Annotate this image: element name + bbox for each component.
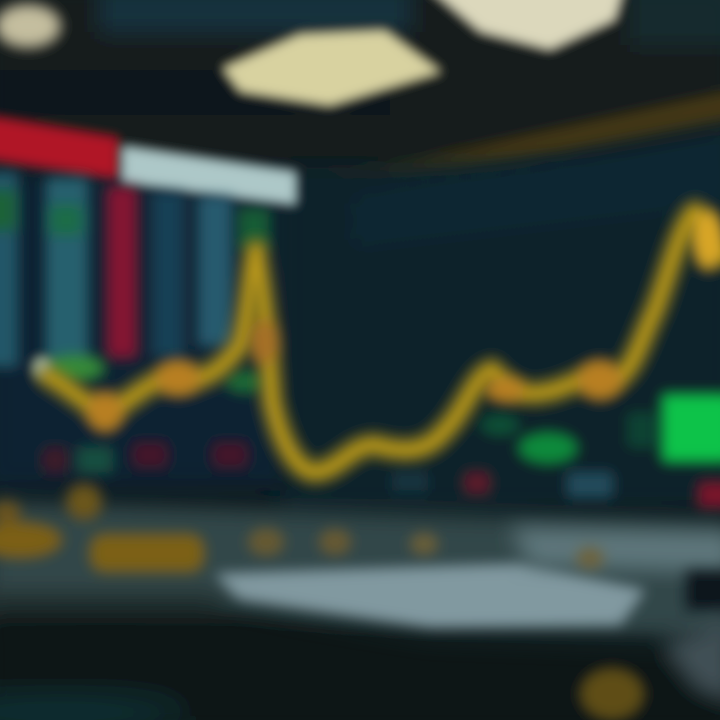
yellow price line bbox=[48, 210, 720, 472]
lower screen candles bbox=[42, 394, 720, 508]
left table panel bbox=[0, 116, 296, 393]
green block centre bbox=[518, 432, 578, 464]
light: centre panel bbox=[222, 30, 442, 106]
ceiling lights bbox=[0, 0, 625, 106]
dark foreground bbox=[0, 612, 720, 720]
grey object bottom right bbox=[660, 615, 720, 705]
ceiling bbox=[0, 0, 720, 190]
left screen background bbox=[0, 170, 285, 490]
chart screen bbox=[0, 125, 720, 510]
gold object bottom bbox=[580, 668, 644, 720]
black object right bbox=[686, 570, 720, 610]
green column accents bbox=[0, 190, 270, 393]
gold stripe above screen bbox=[330, 90, 720, 195]
desk bbox=[0, 500, 720, 640]
green block right bbox=[662, 394, 720, 462]
orange peak markers bbox=[87, 210, 720, 432]
bright desk slab bbox=[215, 564, 645, 628]
gold coins on desk bbox=[0, 484, 604, 572]
blue marks bbox=[567, 472, 613, 498]
white header bbox=[122, 146, 296, 205]
blue columns bbox=[0, 172, 232, 368]
red marks bbox=[464, 472, 490, 494]
light: top right panel bbox=[425, 0, 625, 50]
red header bbox=[0, 116, 118, 178]
light: top left bbox=[0, 5, 60, 47]
white marker bbox=[33, 357, 51, 379]
red column bbox=[107, 186, 137, 358]
